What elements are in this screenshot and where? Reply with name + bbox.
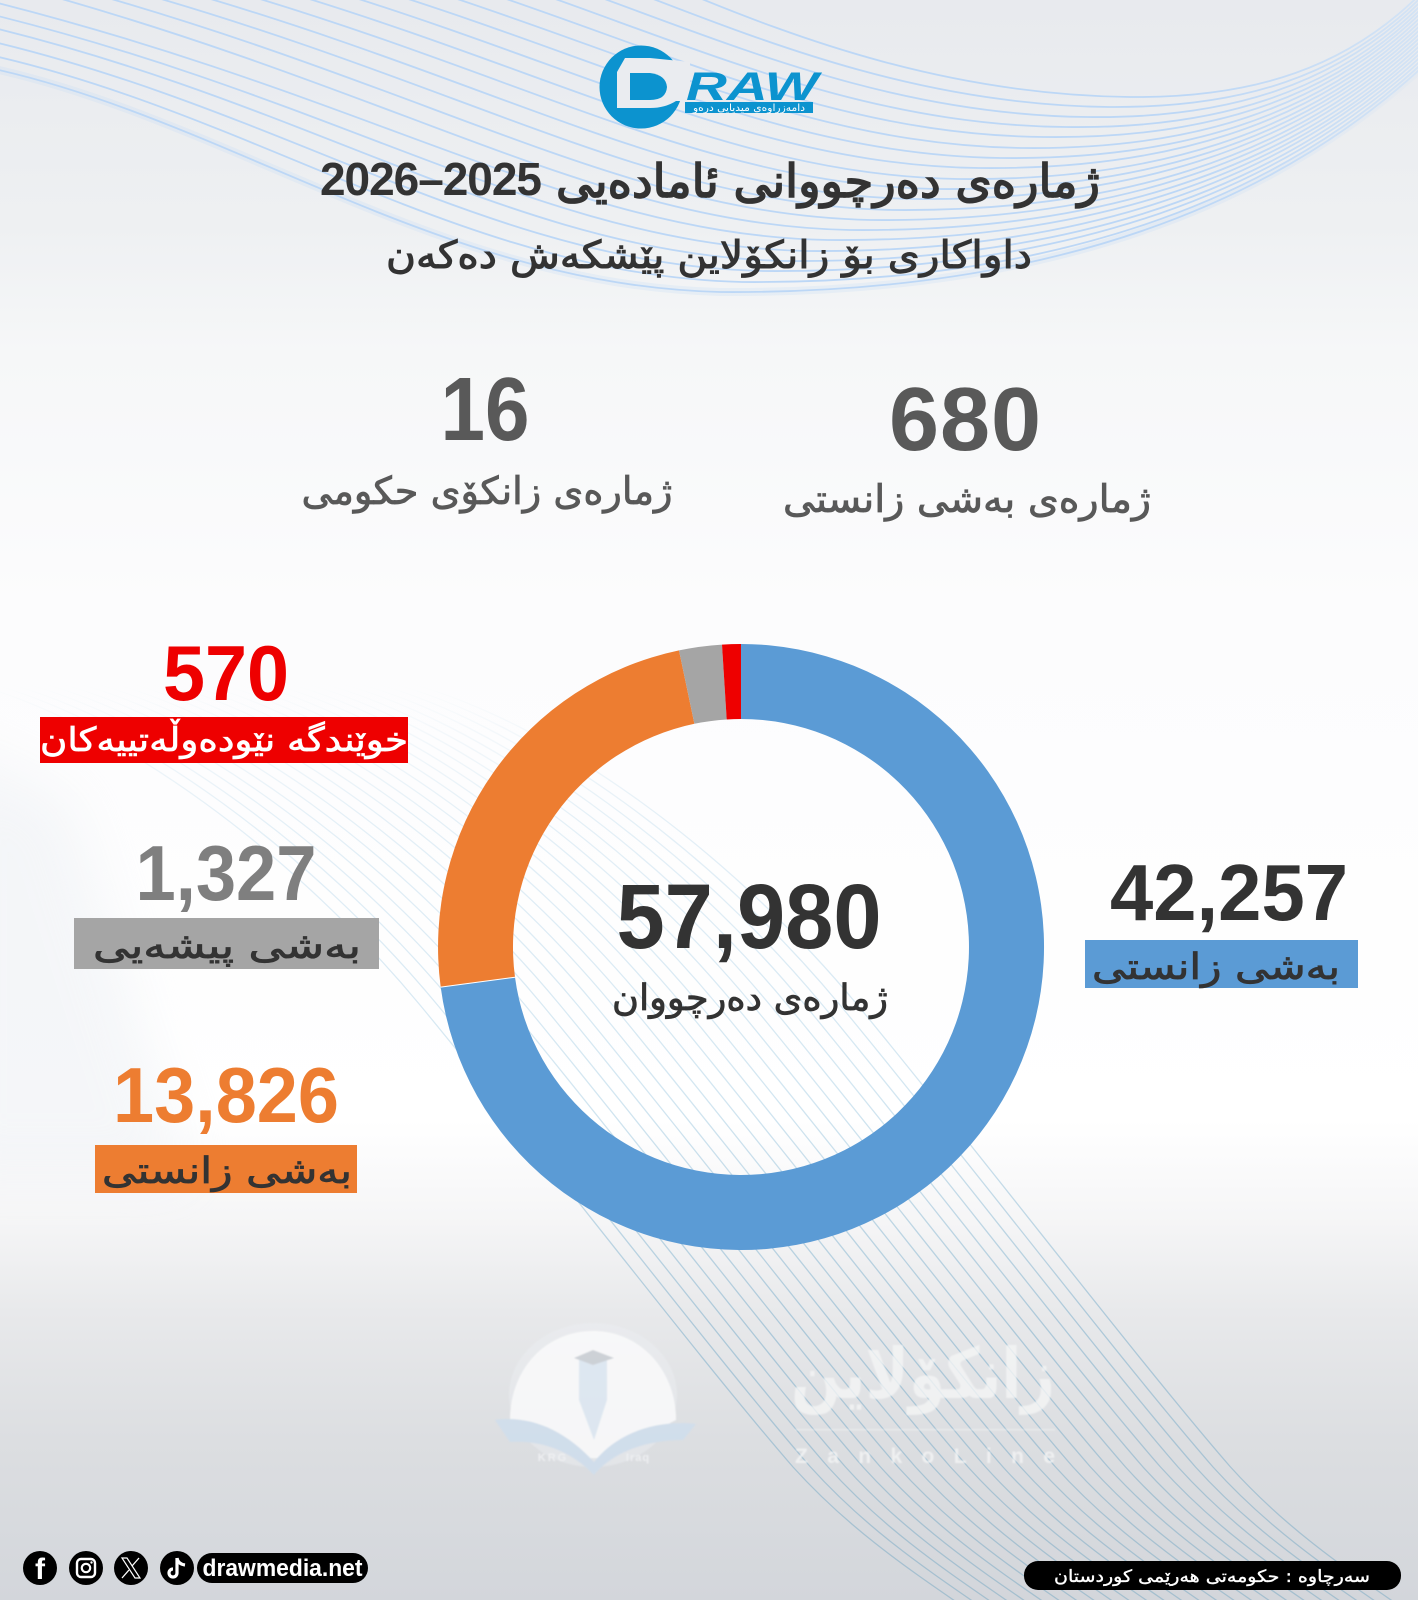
source pill: سەرچاوە : حکومەتی هەرێمی کوردستان xyxy=(1054,1567,1370,1587)
callout: 570 international schools xyxy=(40,629,408,763)
callout: 1,327 vocational: بەشی پیشەیی xyxy=(93,926,361,967)
callout: 1,327 vocational xyxy=(74,829,379,969)
watermark: ZankoLine wordmark: ZankoLine xyxy=(795,1445,1055,1468)
social: facebook icon xyxy=(23,1551,57,1586)
title xyxy=(320,153,1100,209)
social: tiktok icon xyxy=(160,1551,194,1585)
social: instagram icon xyxy=(69,1551,103,1585)
donut center total: ژمارەی دەرچووان xyxy=(612,978,888,1019)
callout: 13,826 orange: 13,826 xyxy=(113,1051,339,1139)
callout: 42,257 scientific: بەشی زانستی xyxy=(1092,947,1340,988)
watermark: ZankoLine wordmark xyxy=(791,1333,1055,1468)
watermark: emblem: KRG xyxy=(538,1452,568,1464)
slice: scientific 42,257 xyxy=(441,644,1044,1250)
callout: 570 international schools: خوێندگە نێودەوڵەتییەکان xyxy=(40,719,408,759)
background: upper wave lines xyxy=(0,0,1418,292)
subtitle: داواکاری بۆ زانکۆلاین پێشکەش دەکەن xyxy=(386,233,1032,278)
logo: DRAW xyxy=(600,46,823,128)
background: pale left band xyxy=(0,740,190,1180)
slice: orange 13,826 xyxy=(438,650,694,987)
stat: 680 scientific departments: 680 xyxy=(889,370,1041,470)
callout: 42,257 scientific xyxy=(1085,848,1358,988)
watermark: ZankoLine wordmark: زانکۆلاین xyxy=(791,1333,1055,1415)
stat: 16 public universities: ژمارەی زانکۆی حکومی xyxy=(302,469,672,514)
callout: 13,826 orange xyxy=(95,1051,357,1193)
stat: 680 scientific departments xyxy=(783,370,1151,521)
stat: 680 scientific departments: ژمارەی بەشی زانستی xyxy=(783,477,1151,521)
website pill: drawmedia.net xyxy=(202,1555,363,1582)
callout: 1,327 vocational: 1,327 xyxy=(136,829,316,917)
donut center total: 57,980 xyxy=(616,866,882,968)
callout: 570 international schools: 570 xyxy=(163,629,289,717)
social: facebook icon: f xyxy=(35,1553,46,1586)
title: years: 2026–2025 xyxy=(320,153,542,205)
callout: 42,257 scientific: 42,257 xyxy=(1110,848,1348,937)
slice: vocational 1,327 xyxy=(679,645,727,724)
background: lower diagonal lines xyxy=(0,680,1406,1600)
watermark: emblem xyxy=(495,1323,696,1475)
slice: international 570 xyxy=(722,644,741,720)
donut chart xyxy=(438,644,1044,1250)
stat: 16 public universities xyxy=(302,360,672,514)
social: X icon xyxy=(114,1551,148,1585)
logo: DRAW: RAW xyxy=(686,65,823,109)
donut center total xyxy=(612,866,888,1019)
watermark: emblem: Iraq xyxy=(626,1452,650,1464)
callout: 13,826 orange: بەشی زانستی xyxy=(102,1151,352,1192)
logo: DRAW: دامەزراوەی میدیایی درەو xyxy=(692,103,805,114)
title: words: ژمارەی دەرچووانی ئامادەیی xyxy=(556,154,1100,209)
stat: 16 public universities: 16 xyxy=(440,360,530,460)
source pill xyxy=(1024,1561,1401,1590)
